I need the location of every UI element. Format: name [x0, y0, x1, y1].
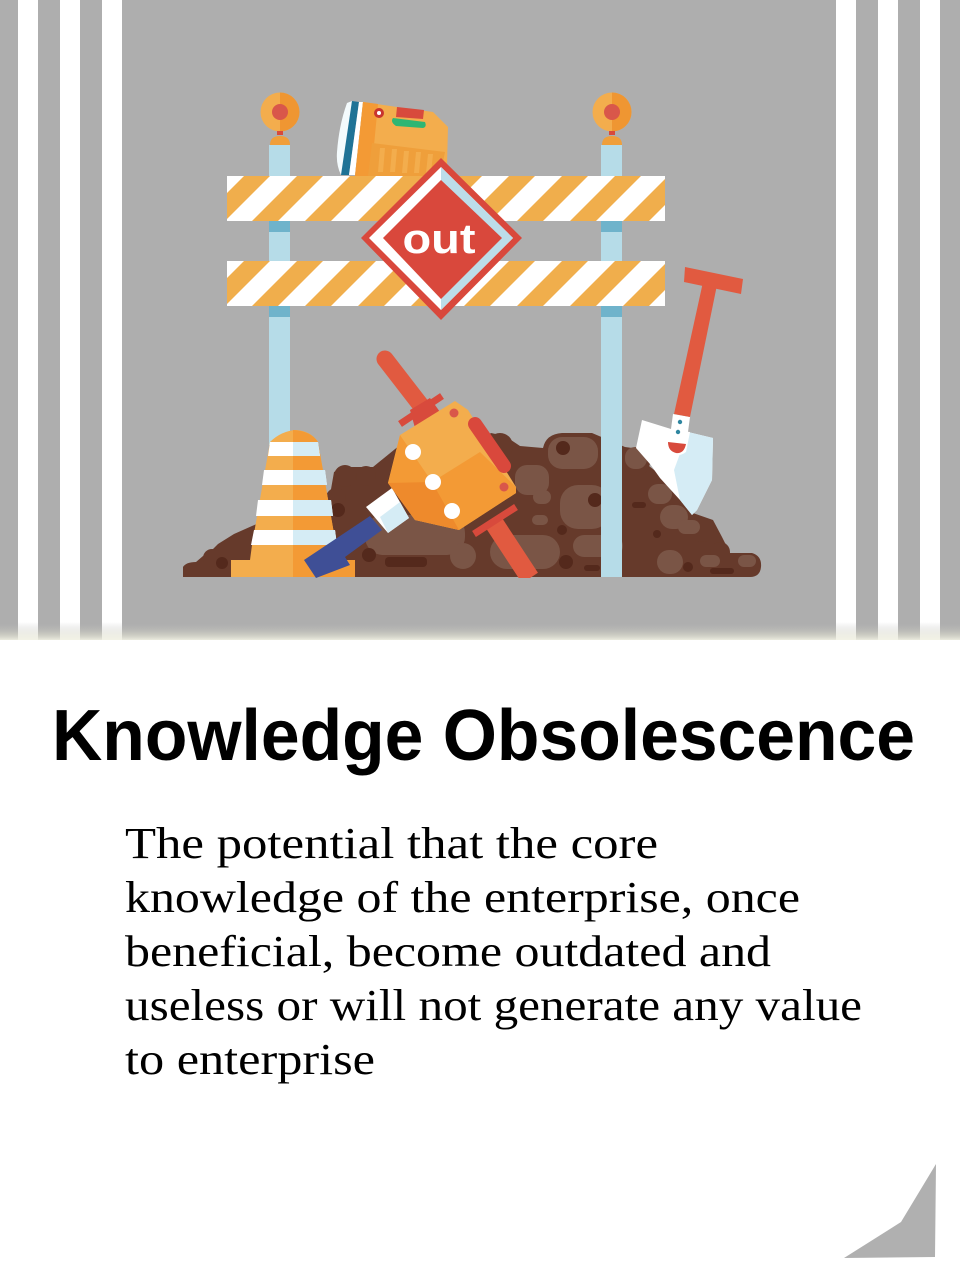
- text block: definition: to enterprise: [125, 1035, 375, 1084]
- illustration: jackhammer: [304, 359, 530, 578]
- text block: definition: useless or will not generate any value: [125, 981, 862, 1030]
- text block: definition: [125, 819, 862, 1084]
- icon: left warning lamp: [260, 92, 300, 145]
- title: Knowledge Obsolescence: [52, 696, 915, 776]
- sign label: out: [402, 215, 476, 262]
- text block: definition: beneficial, become outdated and: [125, 927, 771, 976]
- text block: definition: The potential that the core: [125, 819, 658, 868]
- text block: definition: knowledge of the enterprise, once: [125, 873, 800, 922]
- illustration: shovel: [636, 267, 743, 515]
- icon: diamond out sign: [361, 158, 522, 320]
- illustration: right post: [601, 145, 622, 577]
- illustration: lower striped barrier board: [227, 261, 665, 306]
- illustration: traffic cone: [231, 430, 355, 577]
- icon: right warning lamp: [592, 92, 632, 145]
- icon: flashlight: [337, 101, 448, 176]
- illustration: dirt pile: [183, 433, 761, 577]
- illustration: left post: [269, 145, 290, 445]
- panel: illustration background with vertical stripes: [0, 0, 960, 640]
- illustration: upper striped barrier board: [227, 176, 665, 221]
- icon: folded page corner: [844, 1164, 936, 1258]
